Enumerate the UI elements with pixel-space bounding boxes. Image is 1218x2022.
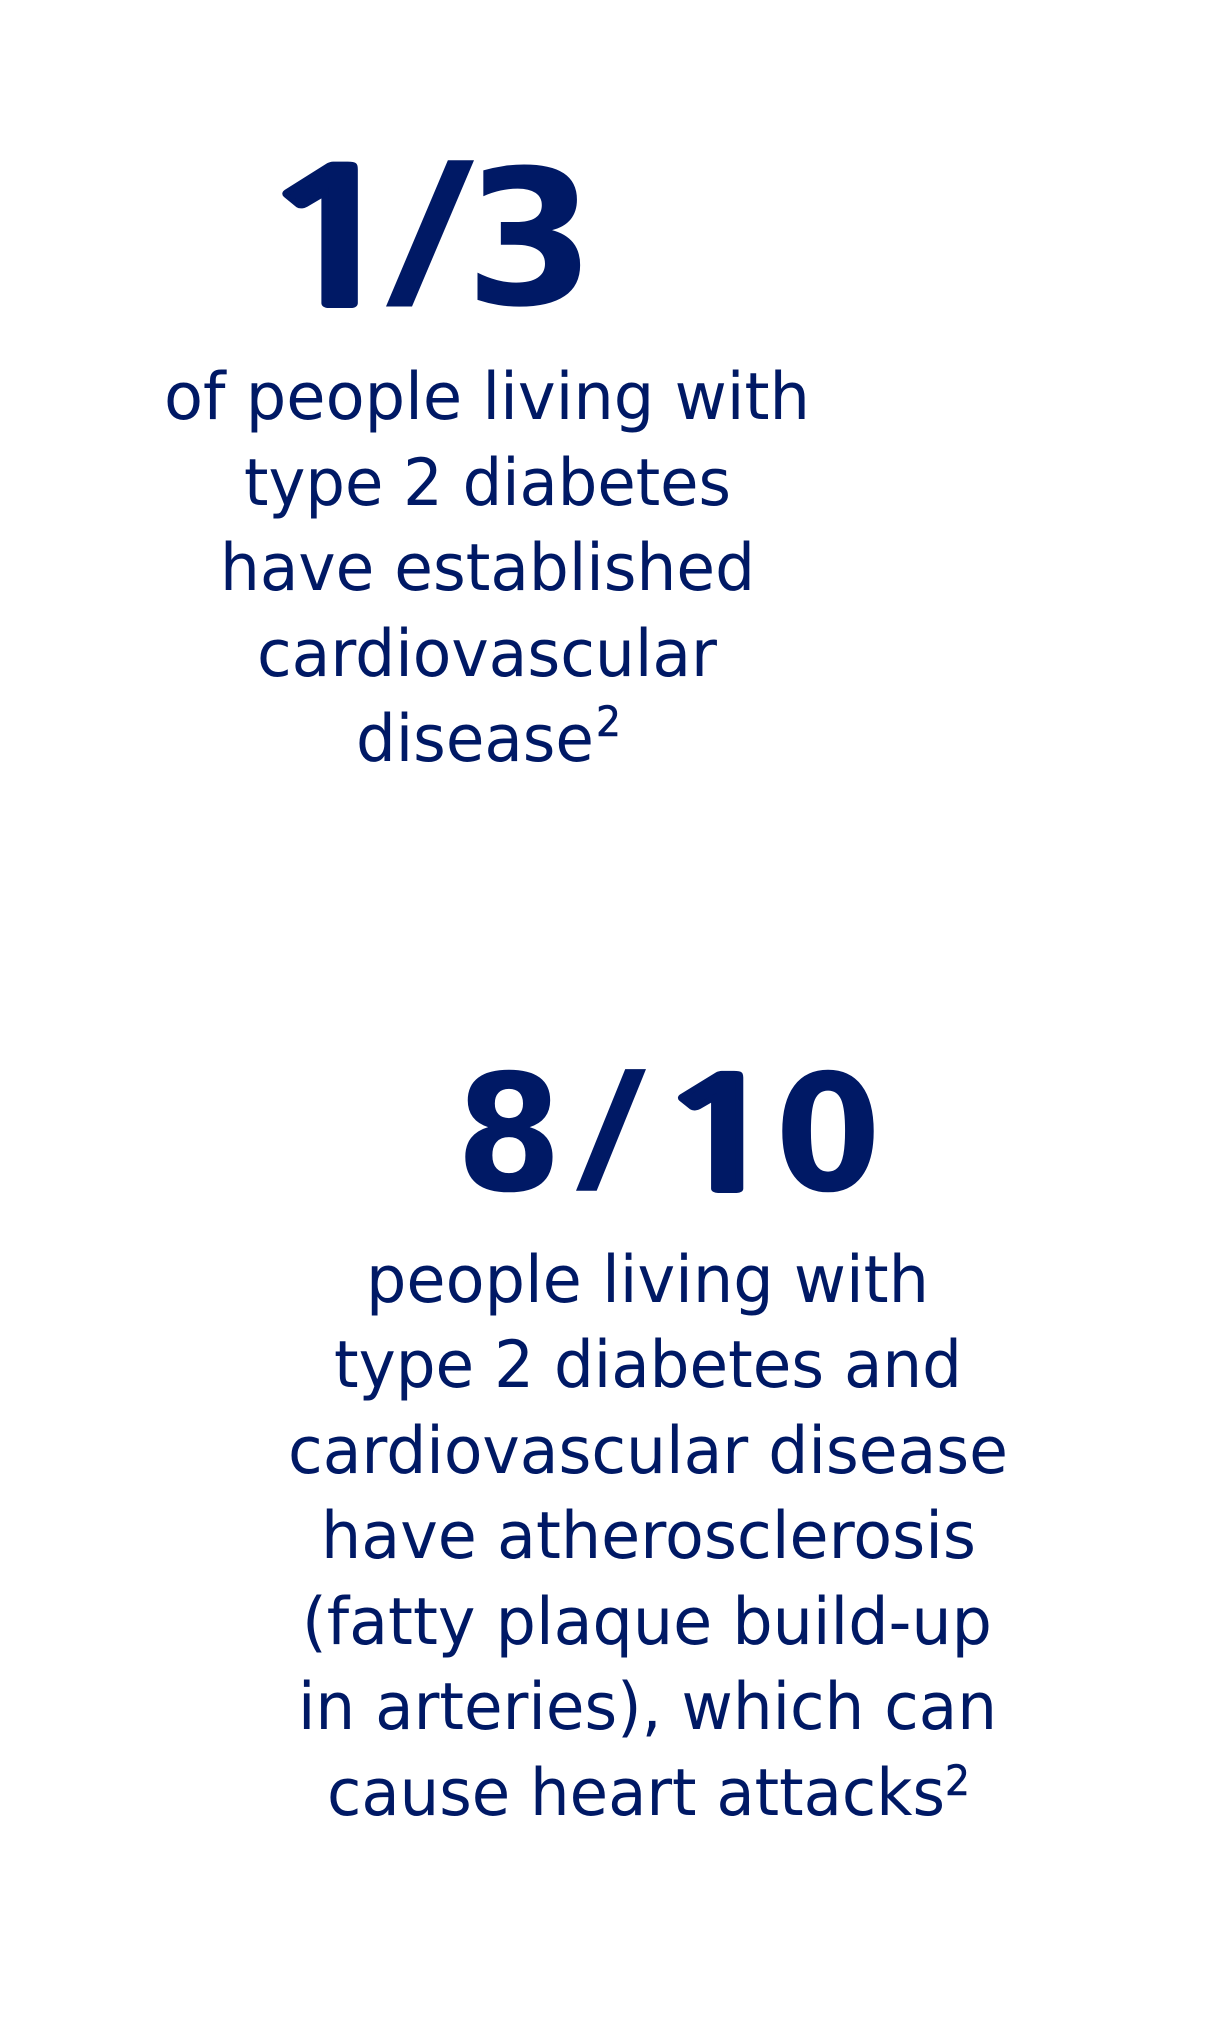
description: one third text: cardiovascular bbox=[257, 617, 717, 692]
description: eight in ten text: (fatty plaque build-up bbox=[302, 1585, 992, 1660]
big number: 8/10: 1 bbox=[652, 1060, 792, 1213]
big number: 1/3: / bbox=[386, 125, 475, 332]
description: one third text: of people living with bbox=[164, 360, 810, 435]
big number: 1/3: 3 bbox=[465, 130, 595, 349]
big number: 8/10 bbox=[456, 1040, 881, 1229]
description: eight in ten text bbox=[288, 1243, 1008, 1831]
description: one third text: have established bbox=[220, 531, 755, 606]
description: one third text bbox=[164, 360, 810, 777]
description: one third text: type 2 diabetes bbox=[244, 446, 731, 521]
statistic block: eight in ten bbox=[288, 1040, 1008, 1831]
description: one third text: disease bbox=[356, 702, 594, 777]
description: eight in ten text: 2 bbox=[945, 1756, 970, 1805]
description: eight in ten text: people living with bbox=[366, 1243, 929, 1318]
description: eight in ten text: cardiovascular disease bbox=[288, 1414, 1008, 1489]
statistic block: one third bbox=[164, 125, 810, 777]
big number: 8/10: 8 bbox=[456, 1041, 562, 1229]
big number: 1/3: 1 bbox=[251, 149, 416, 333]
description: one third text: 2 bbox=[596, 697, 621, 746]
big number: 8/10: / bbox=[576, 1040, 647, 1212]
description: eight in ten text: in arteries), which can bbox=[298, 1670, 997, 1745]
big number: 1/3 bbox=[251, 125, 595, 349]
description: eight in ten text: cause heart attacks bbox=[327, 1756, 945, 1831]
big number: 8/10: 0 bbox=[775, 1041, 881, 1229]
description: eight in ten text: type 2 diabetes and bbox=[334, 1328, 962, 1403]
description: eight in ten text: have atherosclerosis bbox=[321, 1499, 976, 1574]
